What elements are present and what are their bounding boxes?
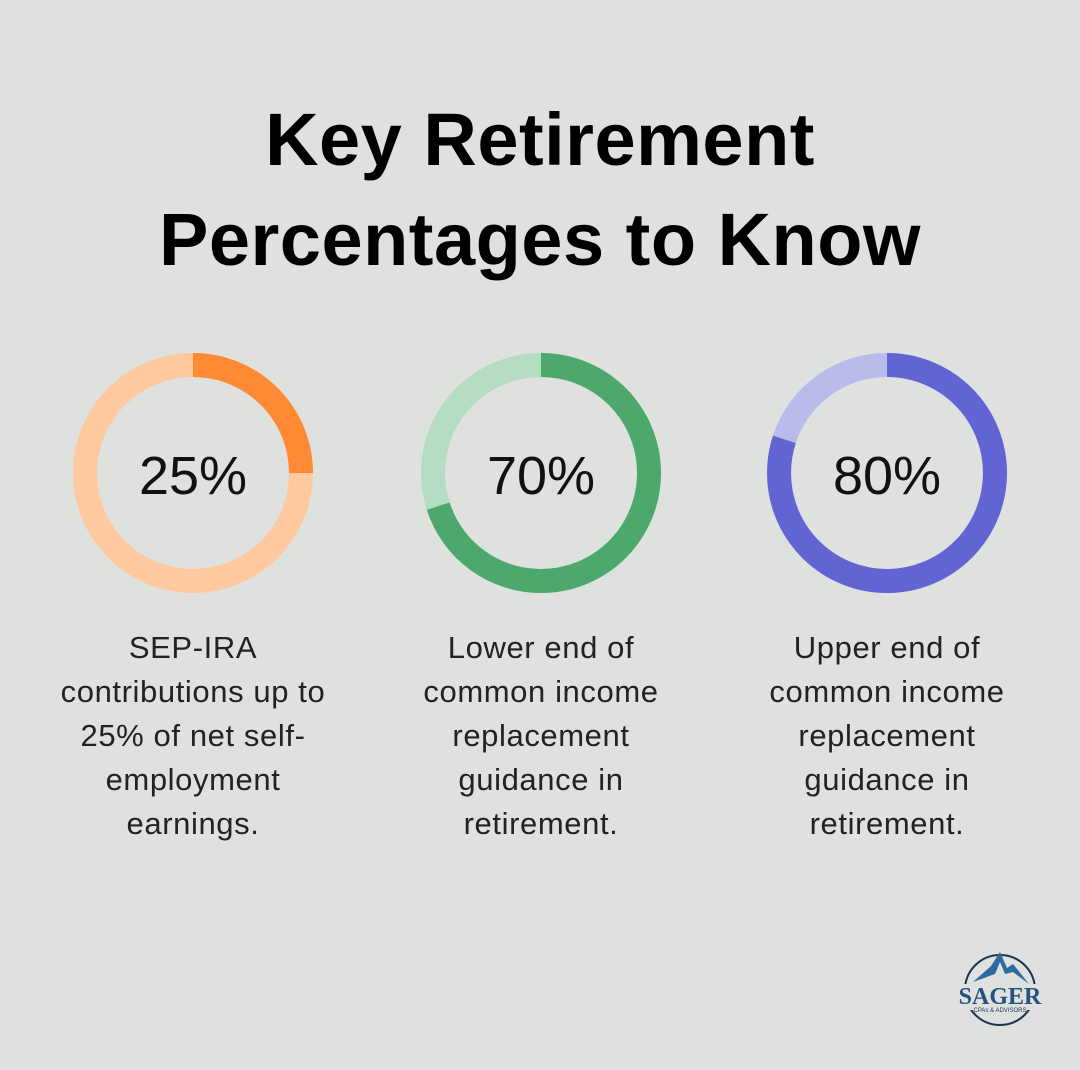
text: lower end: retirement. bbox=[464, 806, 618, 841]
text: SEP-IRA: employment bbox=[106, 762, 280, 797]
donut chart: 25% bbox=[73, 353, 313, 593]
logo bbox=[959, 952, 1042, 1026]
text: upper end: common income bbox=[769, 674, 1005, 709]
text: lower end bbox=[423, 630, 659, 841]
text: lower end: guidance in bbox=[458, 762, 624, 797]
text: SEP-IRA: SEP-IRA bbox=[129, 630, 257, 665]
title: Key Retirement bbox=[265, 98, 815, 181]
text: lower end: common income bbox=[423, 674, 659, 709]
text: SEP-IRA bbox=[61, 630, 325, 841]
panel: 70% bbox=[421, 353, 661, 593]
title: Percentages to Know bbox=[159, 198, 921, 281]
text: SEP-IRA: contributions up to bbox=[61, 674, 325, 709]
value: 25% bbox=[139, 446, 247, 506]
logo: CPAs & ADVISORS bbox=[974, 1008, 1026, 1014]
logo: SAGER bbox=[959, 984, 1042, 1010]
text: upper end: replacement bbox=[798, 718, 976, 753]
text: SEP-IRA: earnings. bbox=[127, 806, 259, 841]
text: lower end: Lower end of bbox=[448, 630, 634, 665]
text: upper end: Upper end of bbox=[794, 630, 980, 665]
value: 80% bbox=[833, 446, 941, 506]
text: lower end: replacement bbox=[452, 718, 630, 753]
panel: 25% bbox=[73, 353, 313, 593]
text: upper end bbox=[769, 630, 1005, 841]
panel: 80% bbox=[767, 353, 1007, 593]
title bbox=[159, 98, 921, 281]
donut chart: 70% bbox=[421, 353, 661, 593]
text: upper end: retirement. bbox=[810, 806, 964, 841]
value: 70% bbox=[487, 446, 595, 506]
donut chart: 80% bbox=[767, 353, 1007, 593]
text: SEP-IRA: 25% of net self- bbox=[80, 718, 306, 753]
text: upper end: guidance in bbox=[804, 762, 970, 797]
